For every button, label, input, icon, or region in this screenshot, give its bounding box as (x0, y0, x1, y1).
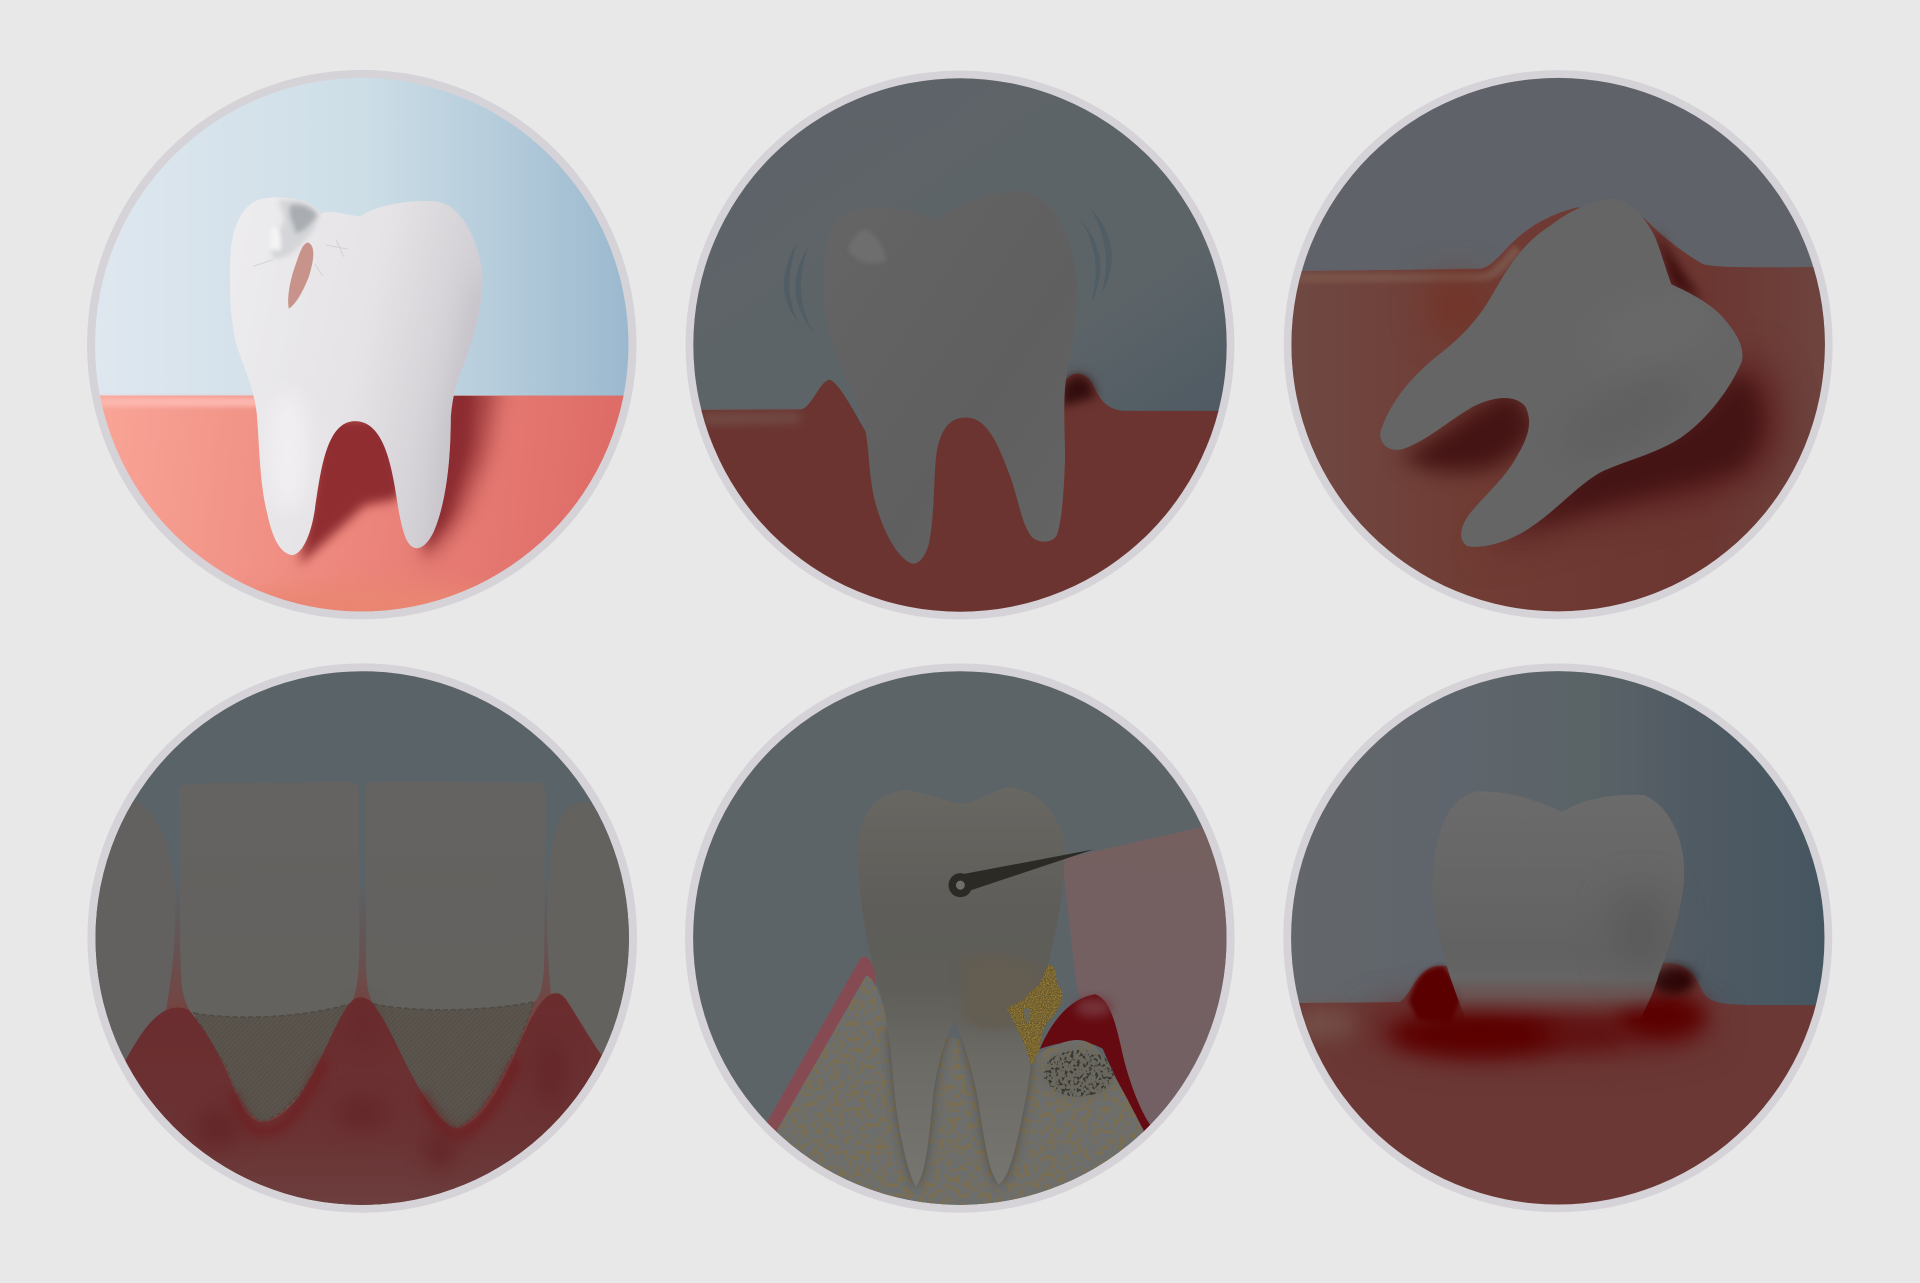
circle ring (1283, 663, 1832, 1212)
tooth crown fading into gum (1433, 791, 1684, 1020)
spot tip (357, 1007, 371, 1045)
circle ring (1284, 70, 1833, 619)
icon: wobble lines left (784, 242, 814, 333)
pointer ring (949, 873, 972, 897)
molar (858, 787, 1065, 1186)
spot centre (336, 1098, 388, 1128)
warm gum glow (1429, 281, 1481, 332)
gum swelling highlight (1075, 998, 1112, 1016)
bleeding area (1362, 966, 1710, 1058)
inflamed gum right (1040, 994, 1151, 1134)
crown (366, 782, 545, 1128)
soft wide shadow beneath tooth (1532, 358, 1788, 538)
circle ring (87, 663, 637, 1213)
circle ring (87, 70, 637, 619)
spot left (196, 1109, 240, 1147)
blood under crown right (1618, 993, 1706, 1039)
tooth body (230, 197, 483, 555)
hairline cracks (254, 239, 347, 276)
deep shadow beneath tooth (1399, 373, 1761, 538)
tooth shading (272, 199, 479, 539)
spot right (538, 1038, 564, 1105)
tartar grain (1003, 959, 1066, 1068)
tooth cast shadow (300, 379, 499, 565)
crown shaded side (1614, 890, 1666, 972)
tartar gap (1023, 1007, 1031, 1023)
grey backdrop (688, 665, 1236, 1211)
central tooth left (179, 782, 359, 1121)
inflamed margin (233, 1060, 518, 1136)
scene: bleeding gums (1270, 668, 1850, 1230)
scene: loose tooth (693, 78, 1227, 612)
exposed root (373, 1002, 534, 1128)
light crown band (1588, 288, 1721, 369)
lower pink fill (88, 1010, 636, 1206)
darker lower body (1554, 371, 1697, 464)
gum ridge highlight (1296, 245, 1522, 283)
pink callout beam (1062, 826, 1247, 1177)
grey backdrop (1288, 73, 1832, 369)
outer gum left (767, 957, 881, 1135)
circle ring (685, 663, 1235, 1213)
tooth shading (1554, 288, 1721, 464)
tooth body (866, 211, 1076, 564)
crown (179, 782, 359, 1121)
chip lip highlight (269, 227, 281, 251)
grey backdrop (688, 73, 1232, 443)
decayed bone patch (1042, 1049, 1116, 1098)
chip dark core (290, 205, 317, 234)
gum with collars (1270, 963, 1850, 1230)
pointer hole (956, 881, 965, 890)
gum ridge highlight (701, 413, 801, 424)
gum mound (1291, 207, 1825, 612)
panel: bleeding gums (1270, 663, 1850, 1230)
icon: wobble lines right (1079, 209, 1112, 304)
crown glint (850, 232, 884, 262)
tilted molar (1380, 199, 1742, 547)
socket shadow (1062, 375, 1095, 406)
receded gum line (70, 993, 650, 1240)
spot lower (425, 1132, 455, 1169)
shadow between roots (300, 417, 403, 565)
blood under crown left (1388, 1012, 1566, 1058)
blood spots (196, 1007, 564, 1169)
scene: receding gums (70, 665, 650, 1240)
pink gradient behind teeth (88, 883, 636, 1011)
tartar base (1007, 964, 1062, 1064)
left root sheen (278, 413, 300, 496)
scene: cracked tooth (93, 73, 632, 639)
circle ring (686, 71, 1234, 619)
crack opening (288, 242, 313, 309)
panel: loose tooth (670, 71, 1250, 635)
stained enamel (960, 954, 1042, 1030)
grey-blue backdrop (1288, 668, 1829, 1016)
grain noise (1003, 959, 1066, 1068)
blood wide halo (1362, 1001, 1710, 1053)
dark speckles on decayed bone (1042, 1049, 1116, 1098)
gum top highlight (93, 397, 257, 407)
pointer needle (949, 849, 1094, 897)
blood dark collar (1652, 966, 1695, 994)
needle (962, 849, 1094, 890)
side tooth left (92, 802, 175, 1064)
shadow core right (424, 379, 476, 557)
blood left collar (1409, 966, 1462, 1024)
shadow of roots on bone (888, 1021, 1034, 1186)
speckle pattern (766, 966, 1155, 1207)
lower gum glow (256, 588, 472, 612)
exposed root (194, 1004, 351, 1121)
shadow soft right (426, 379, 499, 563)
panel: tartar and periodontal disease (685, 663, 1247, 1240)
panel: cracked tooth (highlighted) (87, 70, 637, 639)
blood middle band (1540, 1021, 1629, 1048)
gum left sheen (1292, 1009, 1359, 1038)
tartar deposit (1003, 959, 1066, 1068)
molar with crack (230, 197, 495, 555)
grey backdrop (88, 665, 636, 1207)
central tooth right (366, 782, 545, 1128)
side tooth right (547, 802, 632, 1055)
speckle patch (1042, 1049, 1116, 1098)
pale blue backdrop (93, 73, 632, 402)
pink gum surface (93, 396, 632, 617)
chipped enamel soft (272, 200, 319, 259)
panel: impacted tilted tooth (1270, 70, 1850, 635)
scene: periodontal cross-section (688, 665, 1247, 1240)
right edge shade (430, 298, 479, 539)
scene: impacted tooth (1291, 78, 1825, 612)
bone texture (766, 966, 1155, 1207)
panel: receding gums with exposed roots (70, 663, 650, 1240)
gum with raised collars (701, 374, 1218, 612)
alveolar bone (777, 975, 1143, 1240)
socket shadow (1655, 229, 1703, 301)
